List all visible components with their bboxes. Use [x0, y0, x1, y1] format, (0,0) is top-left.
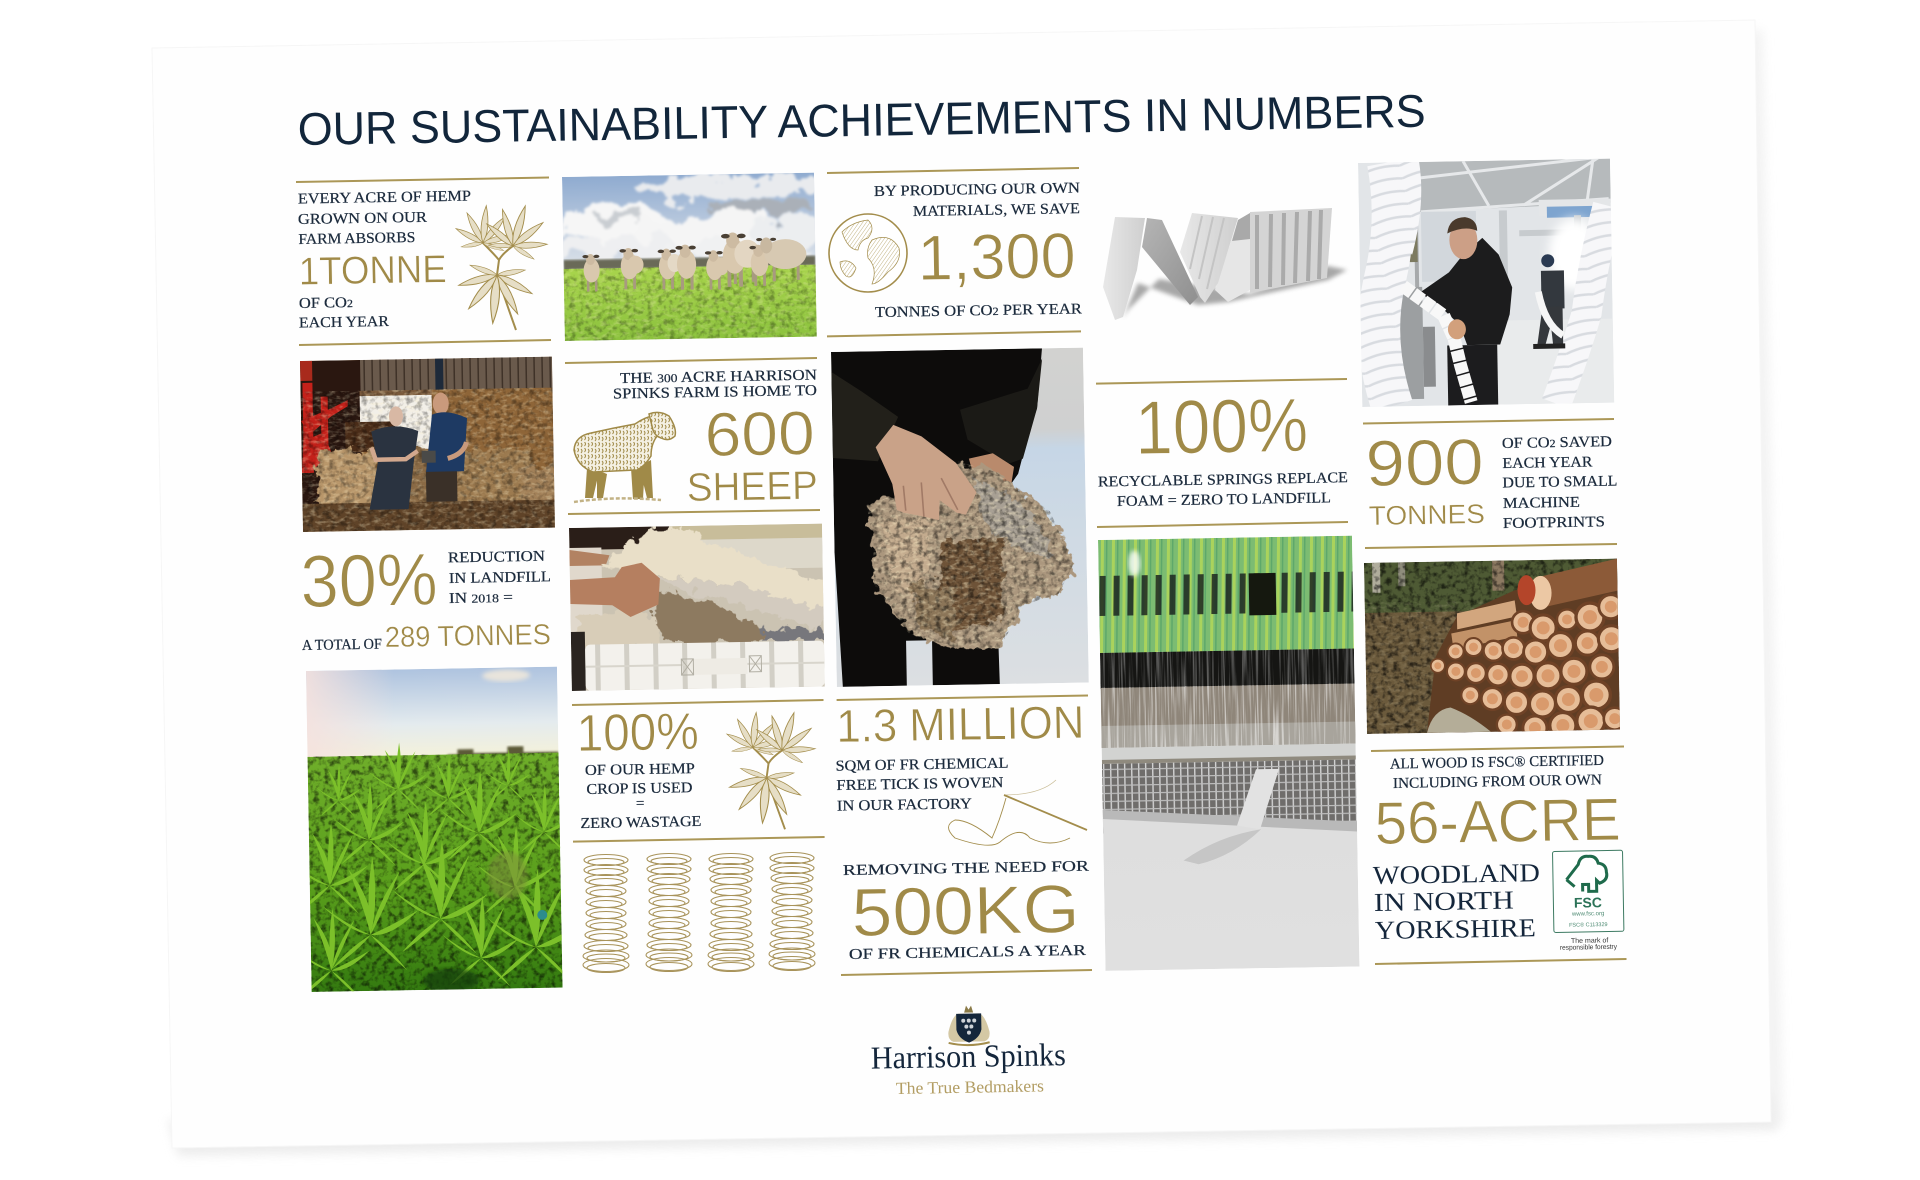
panel: 1.3 million sqm FR chemical free tick	[835, 696, 1092, 975]
text: CO2 saved due to small machine footprints: OF CO 2 SAVED	[1502, 434, 1612, 452]
text: of FR chemicals a year: OF FR CHEMICALS A YEAR	[849, 943, 1086, 963]
text: tonnes of CO2 per year: TONNES OF CO 2 PER YEAR	[875, 301, 1082, 321]
stat: 289 tonnes: 289 TONNES	[385, 619, 551, 654]
text: CO2 saved due to small machine footprints	[1502, 434, 1618, 532]
icon: FSC logo: FSC® C113329	[1569, 921, 1608, 929]
stat: 600: 600	[704, 399, 815, 470]
photo: natural fibre layers on a mattress	[569, 524, 825, 691]
text: every acre of hemp: EVERY ACRE OF HEMP	[298, 188, 471, 207]
icon: sheep illustration	[574, 412, 675, 502]
panel: CO2 saved by producing own materials	[827, 168, 1082, 336]
photo: stacked logs in woodland	[1364, 558, 1627, 774]
text: reduction in landfill in 2018	[448, 549, 551, 607]
text: CO2 saved due to small machine footprints: MACHINE	[1503, 495, 1580, 512]
stat: 100%: 100%	[1134, 383, 1309, 471]
text: all wood is FSC certified	[1390, 753, 1604, 792]
text: 300 acre farm home to: SPINKS FARM IS HOME TO	[613, 383, 817, 402]
text: recyclable springs replace foam	[1098, 470, 1348, 510]
text: sqm of FR chemical free tick: SQM OF FR CHEMICAL	[835, 756, 1009, 775]
text: reduction in landfill in 2018: IN 2018 =	[449, 590, 513, 607]
text: of our hemp crop is used: CROP IS USED	[586, 780, 693, 798]
text: the mark of responsible forestry: The mark of	[1571, 937, 1608, 945]
stat: 1 tonne: 1TONNE	[298, 248, 447, 294]
wordmark: Harrison Spinks	[870, 1036, 1066, 1076]
text: woodland in North Yorkshire	[1373, 858, 1540, 945]
panel: 100% recyclable springs	[1096, 379, 1348, 527]
text: all wood is FSC certified: ALL WOOD IS FSC® CERTIFIED	[1390, 753, 1604, 773]
stat: 500kg: 500KG	[851, 871, 1080, 951]
photo: worker with pocket springs	[1358, 155, 1614, 407]
photo: hemp field	[288, 666, 585, 1000]
text: of CO2 each year	[299, 295, 389, 331]
text: sqm of FR chemical free tick	[835, 756, 1009, 815]
photo: farmers with hemp bales	[300, 357, 555, 532]
panel: 30% reduction in landfill	[300, 538, 551, 654]
text: recyclable springs replace foam: FOAM = ZERO TO LANDFILL	[1117, 490, 1331, 510]
text: of CO2 each year: OF CO 2	[299, 295, 353, 312]
icon: FSC logo: FSC	[1574, 894, 1602, 911]
text: CO2 saved due to small machine footprints: DUE TO SMALL	[1502, 473, 1618, 491]
text: of our hemp crop is used: =	[636, 796, 645, 812]
icon: FSC logo: www.fsc.org	[1571, 911, 1604, 918]
text: woodland in North Yorkshire: IN NORTH	[1374, 886, 1514, 917]
photo: hand holding raw hemp fibre	[831, 348, 1089, 687]
text: every acre of hemp: GROWN ON OUR	[298, 210, 427, 228]
stat: 1.3 million: 1.3 MILLION	[836, 696, 1085, 752]
text: sqm of FR chemical free tick: FREE TICK IS WOVEN	[836, 775, 1004, 794]
icon: globe	[829, 214, 907, 292]
title: OUR SUSTAINABILITY ACHIEVEMENTS IN NUMBERS	[297, 85, 1426, 155]
text: removing the need for: REMOVING THE NEED FOR	[843, 859, 1089, 879]
stat: 30%: 30%	[300, 538, 438, 623]
icon: needle and thread	[948, 780, 1087, 845]
text: reduction in landfill in 2018: REDUCTION	[448, 549, 545, 566]
panel: 600 sheep on the farm	[565, 358, 820, 514]
text: sqm of FR chemical free tick: IN OUR FACTORY	[837, 796, 972, 815]
text: of our hemp crop is used: ZERO WASTAGE	[580, 814, 702, 832]
text: recyclable springs replace foam: RECYCLABLE SPRINGS REPLACE	[1098, 470, 1348, 490]
stat: 900: 900	[1365, 425, 1484, 500]
text: all wood is FSC certified: INCLUDING FROM OUR OWN	[1393, 772, 1602, 792]
text: of our hemp crop is used	[580, 761, 702, 832]
image: folded pocket spring unit	[1103, 208, 1347, 320]
photo: sheep in a field	[542, 172, 835, 341]
panel: 900 tonnes	[1363, 419, 1618, 548]
text: a total of: A TOTAL OF	[302, 637, 382, 654]
icon: hemp leaves	[455, 198, 555, 330]
stat label: tonnes: TONNES	[1369, 499, 1485, 531]
stat: 1,300: 1,300	[917, 219, 1076, 294]
stat label: sheep: SHEEP	[686, 464, 818, 510]
panel: 100% of hemp crop used	[572, 700, 825, 842]
text: of our hemp crop is used: OF OUR HEMP	[585, 761, 695, 779]
text: by producing our own materials: BY PRODUCING OUR OWN	[874, 180, 1080, 200]
text: CO2 saved due to small machine footprints: FOOTPRINTS	[1503, 514, 1605, 532]
stat: 100%: 100%	[576, 703, 699, 763]
logo: Harrison Spinks	[870, 1005, 1066, 1098]
text: 300 acre farm home to: THE 300 ACRE HARRISON	[620, 368, 817, 387]
panel: hemp absorbs one tonne	[296, 178, 555, 345]
icon: FSC logo	[1553, 850, 1624, 932]
text: 300 acre farm home to	[613, 368, 817, 402]
tagline: The True Bedmakers	[896, 1076, 1044, 1098]
icons: four coil springs	[583, 852, 815, 972]
icon: crest	[948, 1005, 990, 1045]
text: woodland in North Yorkshire: YORKSHIRE	[1375, 913, 1536, 945]
icon: hemp leaves	[726, 706, 823, 829]
text: woodland in North Yorkshire: WOODLAND	[1373, 858, 1540, 890]
text: every acre of hemp: FARM ABSORBS	[298, 230, 416, 248]
text: the mark of responsible forestry	[1560, 937, 1617, 952]
text: by producing our own materials: MATERIALS, WE SAVE	[913, 201, 1080, 220]
text: every acre of hemp	[298, 188, 471, 248]
text: reduction in landfill in 2018: IN LANDFILL	[449, 569, 551, 587]
text: the mark of responsible forestry: responsible forestry	[1560, 944, 1617, 952]
stat: 56-acre: 56-ACRE	[1374, 786, 1621, 857]
text: CO2 saved due to small machine footprints: EACH YEAR	[1502, 454, 1593, 472]
text: of CO2 each year: EACH YEAR	[299, 314, 389, 331]
photo: loom with green threads	[1098, 536, 1359, 971]
panel: FSC certified woodland	[1371, 746, 1626, 964]
text: by producing our own materials	[874, 180, 1080, 220]
